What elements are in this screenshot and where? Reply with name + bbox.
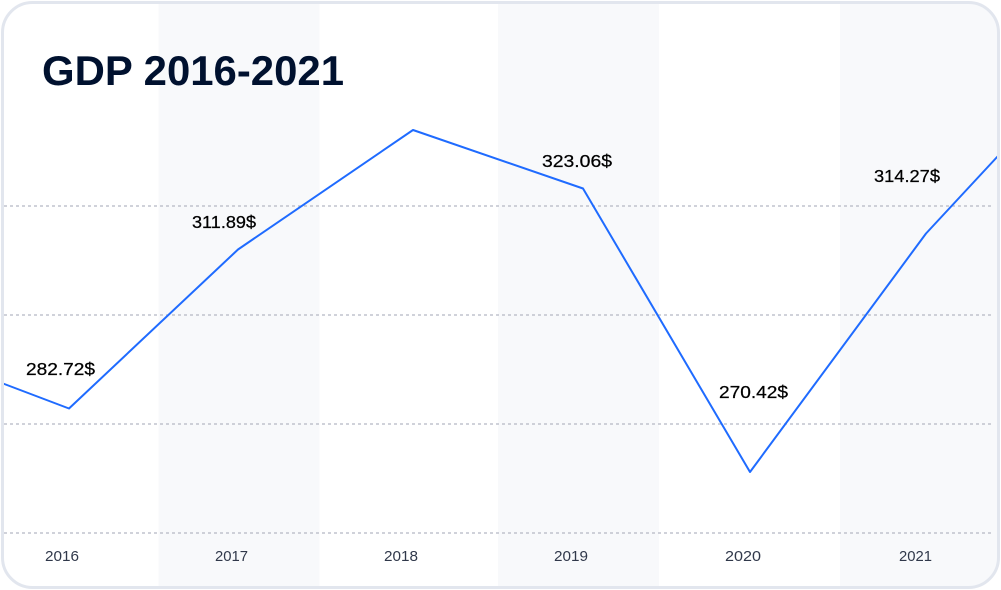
label: 2020 value: 270.42$ xyxy=(719,382,788,402)
axis label: 2018: 2018 xyxy=(384,548,418,565)
title: GDP 2016-2021 xyxy=(42,47,344,94)
label: 2021 value: 314.27$ xyxy=(874,166,940,186)
x-axis year labels xyxy=(45,548,932,565)
label: 2017 value: 311.89$ xyxy=(192,212,256,232)
label: 2016 value: 282.72$ xyxy=(26,359,95,379)
axis label: 2021: 2021 xyxy=(899,548,932,565)
axis label: 2020: 2020 xyxy=(725,548,761,565)
axis label: 2017: 2017 xyxy=(215,548,248,565)
axis label: 2019: 2019 xyxy=(554,548,588,565)
horizontal dotted grid lines xyxy=(4,206,992,533)
axis label: 2016: 2016 xyxy=(45,548,79,565)
label: 2019 value: 323.06$ xyxy=(542,151,612,171)
data labels xyxy=(26,151,940,402)
GDP trend line xyxy=(3,130,998,472)
